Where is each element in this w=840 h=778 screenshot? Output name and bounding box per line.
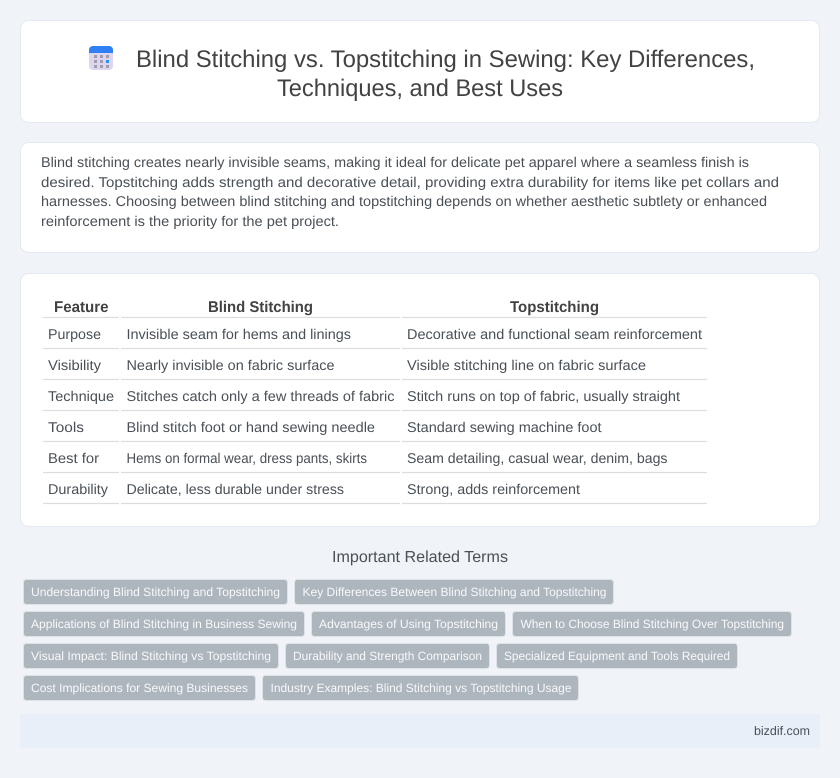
row: best for: Hems on formal wear, dress pants, skirts xyxy=(126,451,367,467)
tag xyxy=(286,644,490,668)
intro paragraph: Blind stitching creates nearly invisible seams, making it ideal for delicate pet apparel where a seamless finish is xyxy=(41,155,749,171)
row: tools: Blind stitch foot or hand sewing needle xyxy=(126,420,375,436)
tag: Durability and Strength Comparison xyxy=(293,649,482,663)
tag: Key Differences Between Blind Stitching and Topstitching xyxy=(302,585,606,599)
tag xyxy=(24,612,304,636)
intro paragraph: desired. Topstitching adds strength and decorative detail, providing extra durability for items like pet collars and xyxy=(41,175,779,191)
tag xyxy=(294,580,614,604)
row: visibility xyxy=(48,358,646,374)
panel: introduction text xyxy=(20,142,820,252)
row: best for: Seam detailing, casual wear, denim, bags xyxy=(407,451,668,467)
row: purpose: Purpose xyxy=(48,327,101,343)
tag: Cost Implications for Sewing Businesses xyxy=(31,681,248,695)
row: purpose: Decorative and functional seam reinforcement xyxy=(407,327,702,343)
table header row: Feature xyxy=(54,299,109,316)
footer credit: bizdif.com xyxy=(754,724,810,738)
row: durability: Strong, adds reinforcement xyxy=(407,482,580,498)
row: visibility: Visible stitching line on fabric surface xyxy=(407,358,646,374)
table header row: Blind Stitching xyxy=(208,299,313,316)
tag: Advantages of Using Topstitching xyxy=(319,617,498,631)
tag xyxy=(496,644,738,668)
row: purpose: Invisible seam for hems and linings xyxy=(126,327,351,343)
icon: calendar xyxy=(89,46,113,70)
intro paragraph xyxy=(41,155,779,230)
tag xyxy=(512,612,792,636)
tag: Understanding Blind Stitching and Topstitching xyxy=(31,585,280,599)
tag: When to Choose Blind Stitching Over Topstitching xyxy=(520,617,784,631)
row: tools: Tools xyxy=(48,420,84,436)
related term tags xyxy=(24,580,792,700)
tag xyxy=(262,676,578,700)
table row lines xyxy=(43,318,707,504)
tag: Industry Examples: Blind Stitching vs Topstitching Usage xyxy=(270,681,572,695)
footer xyxy=(20,714,820,748)
row: visibility: Visibility xyxy=(48,358,102,374)
intro paragraph: harnesses. Choosing between blind stitching and topstitching depends on whether aesthetic subtlety or enhanced xyxy=(41,194,767,210)
row: purpose xyxy=(48,327,702,343)
title: Blind Stitching vs. Topstitching in Sewing: Key Differences, xyxy=(136,46,755,73)
row: durability xyxy=(48,482,580,498)
row: technique: Stitches catch only a few threads of fabric xyxy=(126,389,394,405)
tag xyxy=(24,580,288,604)
tag: Visual Impact: Blind Stitching vs Topstitching xyxy=(31,649,271,663)
panel: header xyxy=(20,20,820,122)
title xyxy=(136,46,755,102)
heading: important related terms: Important Related Terms xyxy=(332,549,508,566)
panel: comparison table xyxy=(20,274,820,526)
tag: Applications of Blind Stitching in Business Sewing xyxy=(31,617,297,631)
row: technique xyxy=(48,389,680,405)
title: Techniques, and Best Uses xyxy=(277,75,563,102)
tag xyxy=(312,612,506,636)
tag xyxy=(24,676,256,700)
row: technique: Stitch runs on top of fabric, usually straight xyxy=(407,389,680,405)
row: tools: Standard sewing machine foot xyxy=(407,420,602,436)
row: tools xyxy=(48,420,602,436)
table header row xyxy=(54,299,599,316)
row: durability: Durability xyxy=(48,482,109,498)
row: best for: Best for xyxy=(48,451,99,467)
tag xyxy=(24,644,278,668)
tag: Specialized Equipment and Tools Required xyxy=(504,649,730,663)
row: visibility: Nearly invisible on fabric surface xyxy=(126,358,335,374)
row: durability: Delicate, less durable under stress xyxy=(126,482,344,498)
table header row: Topstitching xyxy=(510,299,599,316)
row: best for xyxy=(48,451,668,467)
row: technique: Technique xyxy=(48,389,114,405)
intro paragraph: reinforcement is the priority for the pet project. xyxy=(41,214,339,230)
